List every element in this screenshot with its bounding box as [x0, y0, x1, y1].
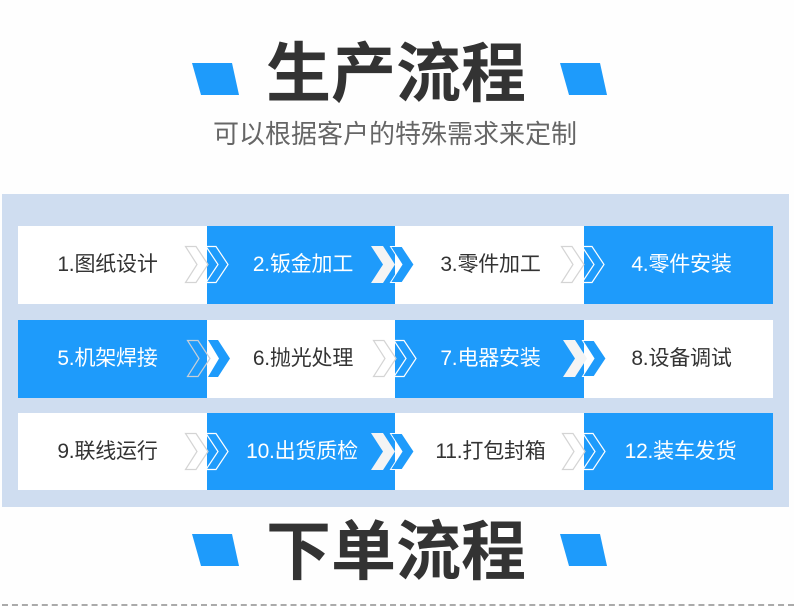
- step 1: 1.图纸设计: [57, 253, 158, 276]
- title: order process: 下单流程: [266, 515, 526, 588]
- icon: right parallelogram bottom: [560, 534, 607, 566]
- step 4: 4.零件安装: [631, 253, 732, 276]
- step 7: 7.电器安装: [440, 347, 541, 370]
- arrow: step 9 to 10: [184, 432, 229, 470]
- step 8: 8.设备调试: [631, 347, 732, 370]
- step 6: [207, 320, 395, 398]
- arrow: step 2 to 3: [371, 246, 414, 283]
- step 6: 6.抛光处理: [253, 347, 353, 370]
- arrow: step 3 to 4: [560, 246, 605, 284]
- step 5: 5.机架焊接: [57, 347, 158, 370]
- panel: process steps: [2, 194, 789, 507]
- step 7: [395, 320, 584, 398]
- step 8: [584, 320, 773, 398]
- step 11: [395, 413, 584, 490]
- step 3: 3.零件加工: [440, 253, 541, 276]
- step 12: 12.装车发货: [625, 440, 736, 462]
- arrow: step 10 to 11: [371, 433, 414, 470]
- step 10: 10.出货质检: [246, 440, 358, 462]
- title: production process: 生产流程: [266, 37, 526, 110]
- arrow: step 1 to 2: [184, 246, 229, 284]
- step 9: 9.联线运行: [57, 440, 158, 462]
- step 12: [584, 413, 773, 490]
- step 10: [207, 413, 395, 490]
- icon: right parallelogram top: [560, 63, 607, 95]
- arrow: step 11 to 12: [562, 432, 606, 470]
- arrow: step 6 to 7: [372, 340, 417, 378]
- step 5: [18, 320, 207, 398]
- arrow: step 5 to 6: [186, 340, 230, 378]
- step 11: 11.打包封箱: [435, 440, 546, 462]
- icon: left parallelogram top: [192, 63, 239, 95]
- subtitle: 可以根据客户的特殊需求来定制: [213, 119, 577, 149]
- step 9: [18, 413, 207, 490]
- step 4: [584, 226, 773, 304]
- step 2: [207, 226, 395, 304]
- icon: left parallelogram bottom: [192, 534, 239, 566]
- step 1: [18, 226, 207, 304]
- step 2: 2.钣金加工: [253, 253, 353, 276]
- step 3: [395, 226, 584, 304]
- arrow: step 7 to 8: [563, 340, 606, 377]
